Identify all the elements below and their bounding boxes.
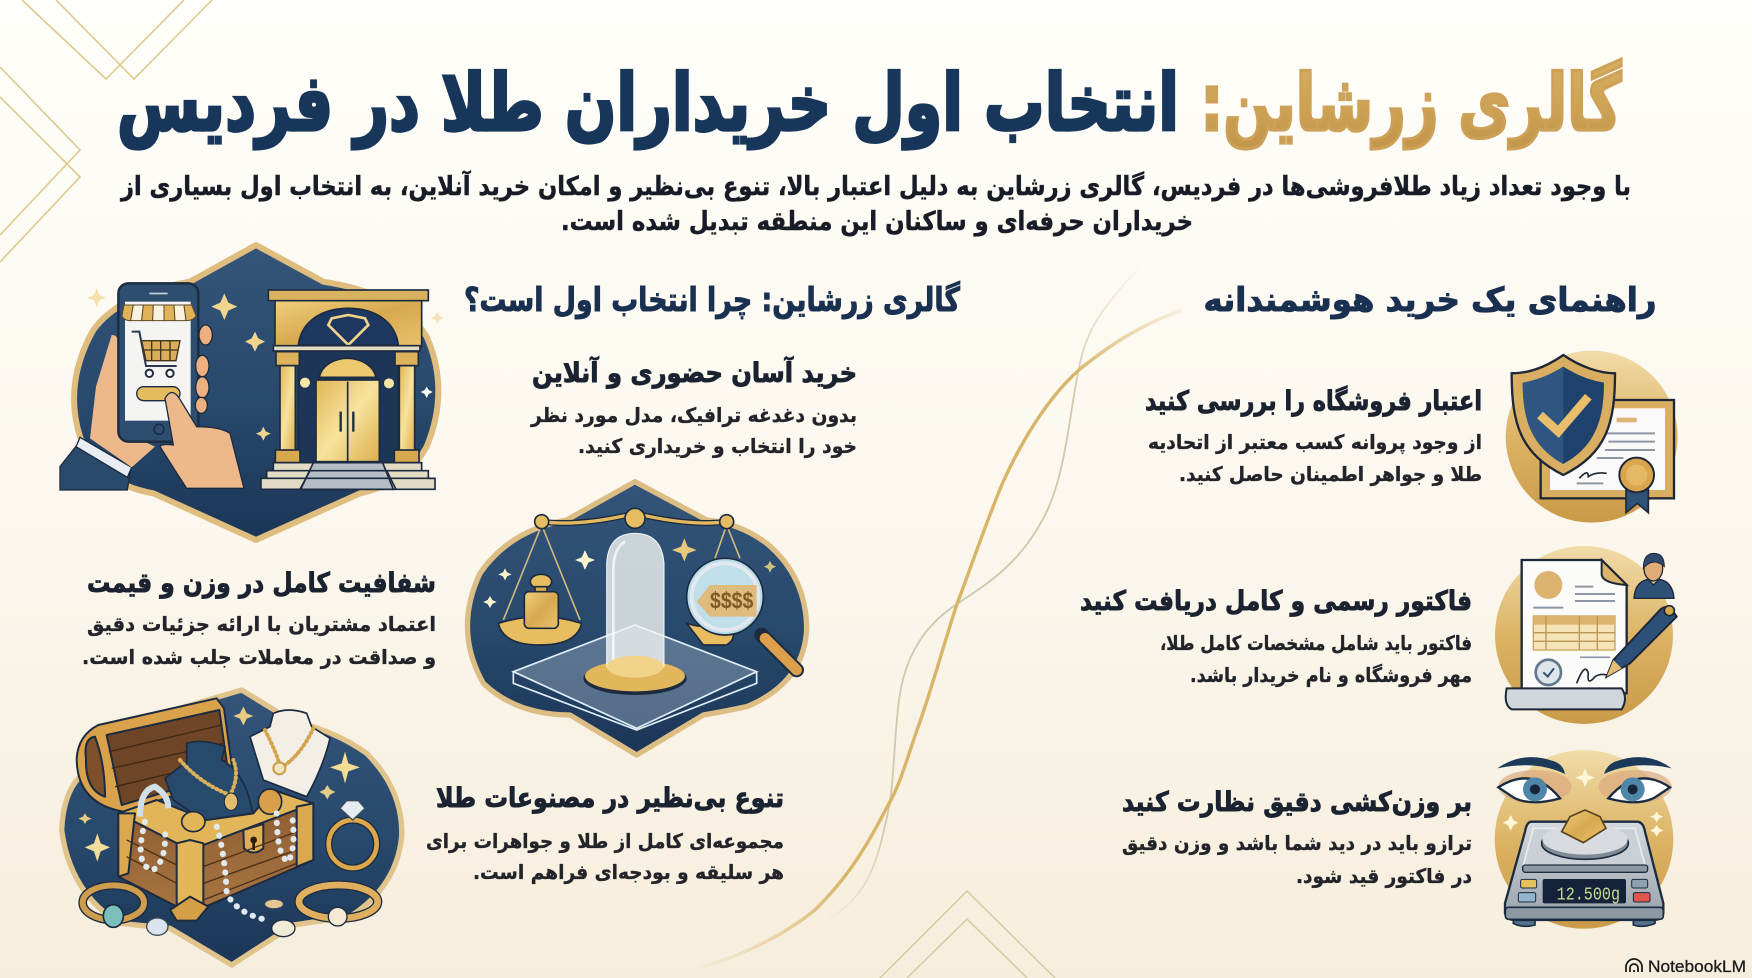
title: انتخاب اول خریداران طلا در فردیس <box>117 59 1179 149</box>
icon: magnifier over price tag <box>687 558 797 670</box>
text block: get the official invoice <box>1080 586 1472 687</box>
icon: white bust with necklace <box>250 710 330 797</box>
text block: supervise exact weighing: ترازو باید در دید شما باشد و وزن دقیق <box>1122 831 1472 855</box>
text block: unmatched variety <box>426 783 784 884</box>
icon: diamond ring <box>329 820 377 868</box>
icon: hand with phone <box>60 283 244 490</box>
illustration: scales and glass case: $$$$ <box>710 587 754 613</box>
text block: unmatched variety: تنوع بی‌نظیر در مصنوعات طلا <box>436 783 784 814</box>
text block: full transparency: شفافیت کامل در وزن و قیمت <box>87 568 436 599</box>
text block: full transparency <box>82 568 436 669</box>
heading: smart purchase guide: راهنمای یک خرید هوشمندانه <box>1204 280 1656 320</box>
text block: full transparency: اعتماد مشتریان با ارائه جزئیات دقیق <box>87 612 436 636</box>
NotebookLM badge: NotebookLM <box>1648 957 1746 976</box>
icon: glass dome on plate <box>513 625 757 728</box>
text block: check store credibility: از وجود پروانه کسب معتبر از اتحادیه <box>1148 430 1482 455</box>
icon: eyes and digital scale <box>1495 750 1673 929</box>
text block: unmatched variety: مجموعه‌ای کامل از طلا و جواهرات برای <box>426 829 784 853</box>
icon: chest lid <box>77 698 233 812</box>
heading: why first choice: گالری زرشاین: چرا انتخاب اول است؟ <box>464 280 961 320</box>
icon: invoice with pen <box>1495 546 1677 724</box>
decorative gold curve <box>690 270 1180 970</box>
intro paragraph: خریداران حرفه‌ای و ساکنان این منطقه تبدیل شده است. <box>561 207 1193 237</box>
text block: check store credibility: اعتبار فروشگاه را بررسی کنید <box>1145 385 1482 417</box>
icon: chest body <box>118 790 313 921</box>
text block: check store credibility <box>1145 385 1482 486</box>
icon: eyes and digital scale: 12.500g <box>1557 883 1620 905</box>
icon: weight on pan <box>498 574 582 645</box>
text block: get the official invoice: فاکتور باید شامل مشخصات کامل طلا، <box>1160 631 1472 655</box>
icon: bracelets and gems <box>83 885 378 920</box>
text block: check store credibility: طلا و جواهر اطمینان حاصل کنید. <box>1179 462 1482 486</box>
icon: shield and certificate <box>1506 351 1678 523</box>
intro paragraph <box>119 170 1631 237</box>
text block: supervise exact weighing <box>1122 787 1472 888</box>
text block: easy in-person and online purchase: بدون دغدغه ترافیک، مدل مورد نظر <box>530 403 857 427</box>
text block: get the official invoice: مهر فروشگاه و نام خریدار باشد. <box>1190 663 1472 687</box>
text block: supervise exact weighing: در فاکتور قید شود. <box>1296 864 1472 888</box>
text block: unmatched variety: هر سلیقه و بودجه‌ای فراهم است. <box>473 860 784 884</box>
text block: supervise exact weighing: بر وزن‌کشی دقیق نظارت کنید <box>1122 787 1472 818</box>
text block: easy in-person and online purchase: خرید آسان حضوری و آنلاین <box>532 356 857 389</box>
icon: pearl strands <box>141 812 294 920</box>
illustration: treasure chest of jewellery <box>62 690 402 965</box>
illustration: scales and glass case <box>467 482 807 755</box>
text block: full transparency: و صداقت در معاملات جلب شده است. <box>82 645 436 669</box>
illustration: phone and gold shop <box>60 245 444 540</box>
icon: shop building <box>261 290 435 489</box>
icon: blue bust with necklace <box>165 741 253 837</box>
text block: easy in-person and online purchase <box>530 356 857 458</box>
text block: get the official invoice: فاکتور رسمی و کامل دریافت کنید <box>1080 586 1472 617</box>
text block: easy in-person and online purchase: خود را انتخاب و خریداری کنید. <box>578 434 857 458</box>
